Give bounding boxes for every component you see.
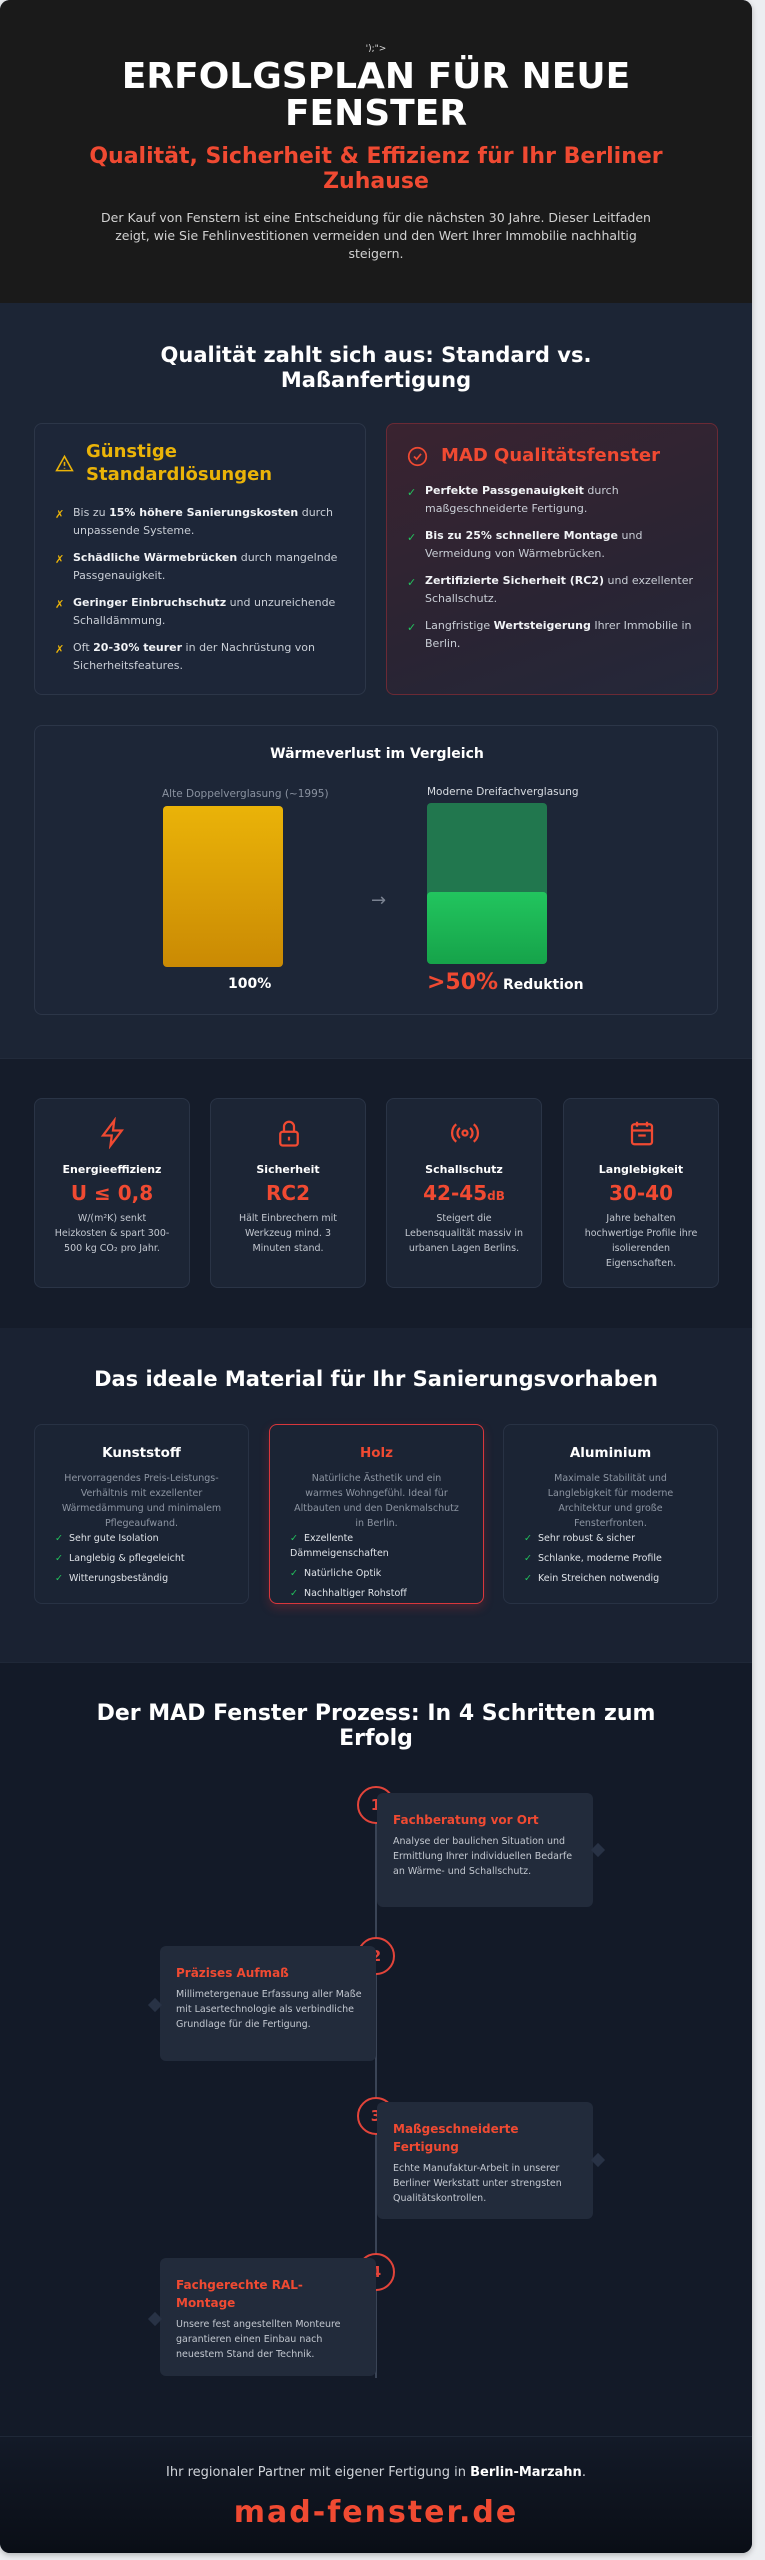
material: Holz: ✓ Exzellente Dämmeigenschaften [290,1533,389,1559]
panel: standard: ✗ [55,553,64,566]
icon: check circle [408,446,428,466]
panel: MAD quality: ✓ [407,531,416,544]
value old: 100% [228,976,271,992]
label old: Alte Doppelverglasung (~1995) [162,788,329,800]
step 2: Millimetergenaue Erfassung aller Maße mit Lasertechnologie als verbindliche Grundlage für die Fertigung. [176,1989,362,2030]
stat: durability: Langlebigkeit [599,1163,683,1176]
material: Aluminium: Aluminium [570,1445,651,1461]
stat: energy: W/(m²K) senkt Heizkosten & spart 300-500 kg CO₂ pro Jahr. [55,1213,169,1254]
heading standard [86,441,272,485]
material: Holz: Natürliche Ästhetik und ein warmes Wohngefühl. Ideal für Altbauten und den Denkmalschutz in Berlin. [294,1473,459,1529]
circle 4: 4 [371,2263,381,2281]
icon: calendar [630,1122,654,1146]
step 4: Fachgerechte RAL-Montage [176,2278,303,2310]
bar old [163,806,283,967]
label new: Moderne Dreifachverglasung [427,786,579,798]
timeline line [375,1806,377,2378]
stat: sound: 42-45dB [423,1181,505,1205]
panel: standard: ✗ [55,598,64,611]
circle 4 [357,2253,395,2291]
circle 1 [357,1786,395,1824]
heading standard: Günstige [86,441,177,462]
step 3 [377,2102,593,2219]
step 1: Analyse der baulichen Situation und Ermittlung Ihrer individuellen Bedarfe an Wärme- und Schallschutz. [393,1836,572,1877]
material: Kunststoff [34,1424,249,1604]
panel: standard: Schädliche Wärmebrücken durch mangelnde Passgenauigkeit. [73,551,337,582]
circle 3: 3 [371,2107,381,2125]
stat: durability: 30-40 [609,1181,673,1205]
material: Kunststoff: Kunststoff [102,1445,181,1461]
circle 1: 1 [371,1796,381,1814]
circle 2 [357,1937,395,1975]
step 2: Präzises Aufmaß [176,1966,289,1980]
stat: energy: Energieeffizienz [63,1163,161,1176]
panel: standard: Oft 20-30% teurer in der Nachrüstung von Sicherheitsfeatures. [73,641,315,672]
subtitle: Qualität, Sicherheit & Effizienz für Ihr Berliner Zuhause [89,144,663,194]
value new: >50% Reduktion [427,970,584,995]
material: Kunststoff: ✓ Witterungsbeständig [55,1573,168,1584]
stat: security [210,1098,366,1288]
panel: MAD quality: Langfristige Wertsteigerung Ihrer Immobilie in Berlin. [425,619,691,650]
icon: bolt [100,1117,124,1149]
chart: heat loss comparison [34,725,718,1015]
intro text: Der Kauf von Fenstern ist eine Entscheidung für die nächsten 30 Jahre. Dieser Leitfaden zeigt, wie Sie Fehlinvestitionen vermeiden und den Wert Ihrer Immobilie nachhaltig steigern. [101,210,651,261]
heading materials: Das ideale Material für Ihr Sanierungsvorhaben [94,1367,658,1391]
material: Holz: Holz [360,1445,393,1461]
section: key stats [0,1058,752,1328]
panel: standard [34,423,366,695]
stray code text: ');"> [366,44,386,54]
material: Aluminium: ✓ Sehr robust & sicher [524,1533,635,1544]
section: comparison [0,303,752,1058]
website: mad-fenster.de [234,2495,518,2530]
stat: sound [386,1098,542,1288]
panel: MAD quality: Perfekte Passgenauigkeit durch maßgeschneiderte Fertigung. [425,484,619,514]
material: Holz: ✓ Nachhaltiger Rohstoff [290,1588,407,1599]
panel: MAD quality: ✓ [407,486,416,499]
material: Holz [269,1424,484,1604]
panel: standard: Bis zu 15% höhere Sanierungskosten durch unpassende Systeme. [73,506,333,536]
panel: MAD quality: ✓ [407,621,416,634]
step 2 [160,1946,376,2061]
stat: energy: U ≤ 0,8 [71,1181,153,1205]
panel: MAD quality [386,423,718,695]
title: ERFOLGSPLAN FÜR NEUE FENSTER [122,56,630,134]
stat: sound: Steigert die Lebensqualität massiv in urbanen Lagen Berlins. [405,1213,523,1254]
stat: security: RC2 [266,1181,310,1205]
panel: MAD quality: Bis zu 25% schnellere Montage und Vermeidung von Wärmebrücken. [425,529,642,560]
step 3: Echte Manufaktur-Arbeit in unserer Berliner Werkstatt unter strengsten Qualitätskontrollen. [393,2163,562,2204]
step 1: Fachberatung vor Ort [393,1813,539,1827]
step 4: Unsere fest angestellten Monteure garantieren einen Einbau nach neuestem Stand der Technik. [176,2319,341,2360]
material: Kunststoff: ✓ Sehr gute Isolation [55,1533,159,1544]
heading MAD: MAD Qualitätsfenster [441,445,660,466]
material: Aluminium: Maximale Stabilität und Langlebigkeit für moderne Architektur und große Fensterfronten. [548,1473,673,1529]
section: process [0,1662,752,2437]
step 3: Maßgeschneiderte Fertigung [393,2122,519,2154]
header [0,0,752,303]
arrow: → [371,890,386,911]
heading: Qualität zahlt sich aus: Standard vs. Maßanfertigung [161,343,591,392]
panel: MAD quality: ✓ [407,576,416,589]
stat: security: Hält Einbrechern mit Werkzeug mind. 3 Minuten stand. [239,1213,337,1254]
panel: standard: ✗ [55,508,64,521]
material: Aluminium: ✓ Schlanke, moderne Profile [524,1553,662,1564]
step 1 [377,1793,593,1907]
heading standard: Standardlösungen [86,464,272,485]
material: Holz: ✓ Natürliche Optik [290,1568,381,1579]
stat: durability: Jahre behalten hochwertige Profile ihre isolierenden Eigenschaften. [585,1213,697,1269]
heading process: Der MAD Fenster Prozess: In 4 Schritten zum Erfolg [97,1701,655,1751]
panel: standard: Geringer Einbruchschutz und unzureichende Schalldämmung. [73,596,335,626]
icon: sound waves [450,1123,480,1143]
stat: energy [34,1098,190,1288]
panel: standard: ✗ [55,643,64,656]
circle 2: 2 [371,1947,381,1965]
bar new [427,803,547,964]
step 4 [160,2258,376,2376]
chart title: Wärmeverlust im Vergleich [270,746,484,762]
footer text: Ihr regionaler Partner mit eigener Fertigung in Berlin-Marzahn. [166,2465,586,2480]
footer [0,2436,752,2553]
stat: security: Sicherheit [256,1163,320,1176]
material: Kunststoff: ✓ Langlebig & pflegeleicht [55,1553,185,1564]
material: Aluminium [503,1424,718,1604]
section: materials [0,1328,752,1662]
circle 3 [357,2097,395,2135]
icon: lock [279,1120,299,1147]
icon: warning [55,454,74,472]
panel: MAD quality: Zertifizierte Sicherheit (RC2) und exzellenter Schallschutz. [425,574,693,604]
stat: sound: Schallschutz [425,1163,503,1176]
material: Aluminium: ✓ Kein Streichen notwendig [524,1573,659,1584]
stat: durability [563,1098,719,1288]
material: Kunststoff: Hervorragendes Preis-Leistungs-Verhältnis mit exzellenter Wärmedämmung und minimalem Pflegeaufwand. [62,1473,221,1529]
